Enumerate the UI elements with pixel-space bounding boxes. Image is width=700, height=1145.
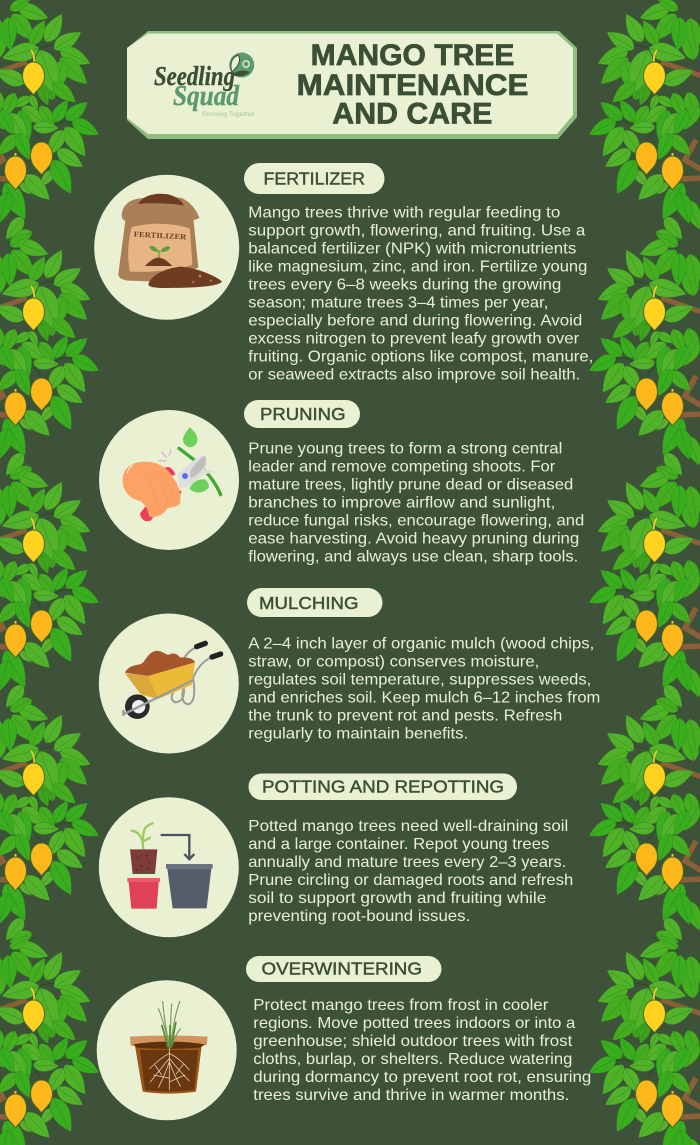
text block: fertilizer: fruiting. Organic options like compost, manure, <box>248 348 593 365</box>
heading pill: pruning: PRUNING <box>260 404 346 424</box>
text block: mulching: A 2–4 inch layer of organic mulch (wood chips, <box>248 635 594 652</box>
panel: pruning <box>99 400 584 565</box>
text block: fertilizer: like magnesium, zinc, and iron. Fertilize young <box>248 258 587 275</box>
text block: overwintering: greenhouse; shield outdoor trees with frost <box>253 1033 573 1050</box>
text block: fertilizer: balanced fertilizer (NPK) with micronutrients <box>248 240 577 257</box>
logo: Seedling Squad: Growing Together <box>202 111 256 118</box>
text block: potting and repotting: and a large container. Repot young trees <box>248 836 550 853</box>
text block: pruning: flowering, and always use clean, sharp tools. <box>248 548 578 565</box>
title text <box>297 39 528 130</box>
text block: potting and repotting: preventing root-bound issues. <box>248 908 470 925</box>
text block: fertilizer: trees every 6–8 weeks during the growing <box>248 276 561 293</box>
text block: fertilizer: season; mature trees 3–4 times per year, <box>248 294 548 311</box>
text block: overwintering: Protect mango trees from frost in cooler <box>253 997 548 1014</box>
heading pill: mulching: MULCHING <box>259 593 358 613</box>
logo: Seedling Squad: Seedling <box>154 61 235 91</box>
logo: Seedling Squad: Squad <box>173 81 240 112</box>
icon: fertilizer bag: FERTILIZER <box>134 230 187 241</box>
text block: pruning <box>248 440 584 565</box>
icon: hand with pruning shears <box>99 410 239 550</box>
icon: repotting seedling <box>99 797 239 937</box>
text block: fertilizer: Mango trees thrive with regular feeding to <box>248 204 561 221</box>
heading pill: fertilizer <box>244 163 384 194</box>
heading pill: fertilizer: FERTILIZER <box>264 168 365 188</box>
left mango tree border <box>0 0 102 1145</box>
panel: fertilizer <box>94 163 593 383</box>
text block: overwintering: cloths, burlap, or shelters. Reduce watering <box>253 1051 572 1068</box>
text block: overwintering: regions. Move potted trees indoors or into a <box>253 1015 576 1032</box>
text block: mulching: regulates soil temperature, suppresses weeds, <box>248 671 591 688</box>
text block: potting and repotting: Prune circling or damaged roots and refresh <box>248 872 573 889</box>
right mango tree border <box>586 0 700 1145</box>
title text: AND CARE <box>332 98 492 130</box>
text block: mulching: and enriches soil. Keep mulch 6–12 inches from <box>248 689 600 706</box>
text block: mulching: straw, or compost) conserves moisture, <box>248 653 539 670</box>
icon: wheelbarrow of mulch <box>99 614 239 754</box>
text block: fertilizer: support growth, flowering, and fruiting. Use a <box>248 222 586 239</box>
title banner <box>127 31 577 139</box>
text block: pruning: branches to improve airflow and sunlight, <box>248 494 555 511</box>
panel: overwintering <box>97 956 591 1120</box>
heading pill: pruning <box>244 400 360 428</box>
text block: fertilizer: especially before and during flowering. Avoid <box>248 312 582 329</box>
text block: overwintering: trees survive and thrive in warmer months. <box>253 1087 569 1104</box>
text block: pruning: leader and remove competing shoots. For <box>248 458 555 475</box>
title text: MANGO TREE <box>311 39 514 72</box>
text block: overwintering: during dormancy to prevent root rot, ensuring <box>253 1069 591 1086</box>
text block: mulching: regularly to maintain benefits. <box>248 725 468 742</box>
text block: potting and repotting <box>248 818 573 925</box>
icon: potted plant with roots <box>97 980 237 1120</box>
text block: pruning: Prune young trees to form a strong central <box>248 440 562 457</box>
panel: potting and repotting <box>99 774 573 937</box>
text block: fertilizer <box>248 204 593 383</box>
heading pill: potting and repotting: POTTING AND REPOTTING <box>262 777 504 797</box>
text block: mulching <box>248 635 600 742</box>
text block: pruning: mature trees, lightly prune dead or diseased <box>248 476 573 493</box>
text block: potting and repotting: annually and mature trees every 2–3 years. <box>248 854 566 871</box>
title text: MAINTENANCE <box>297 69 528 102</box>
text block: potting and repotting: Potted mango trees need well-draining soil <box>248 818 568 835</box>
text block: pruning: reduce fungal risks, encourage flowering, and <box>248 512 584 529</box>
text block: potting and repotting: soil to support growth and fruiting while <box>248 890 546 907</box>
heading pill: mulching <box>247 588 382 617</box>
icon: fertilizer bag <box>94 175 239 320</box>
logo: Seedling Squad <box>154 52 256 118</box>
heading pill: potting and repotting <box>248 774 517 800</box>
panel: mulching <box>99 588 600 754</box>
heading pill: overwintering: OVERWINTERING <box>262 958 422 978</box>
heading pill: overwintering <box>246 956 442 982</box>
text block: fertilizer: or seaweed extracts also improve soil health. <box>248 366 580 383</box>
text block: mulching: the trunk to prevent rot and pests. Refresh <box>248 707 562 724</box>
text block: fertilizer: excess nitrogen to prevent leafy growth over <box>248 330 579 347</box>
text block: pruning: ease harvesting. Avoid heavy pruning during <box>248 530 579 547</box>
text block: overwintering <box>253 997 591 1104</box>
